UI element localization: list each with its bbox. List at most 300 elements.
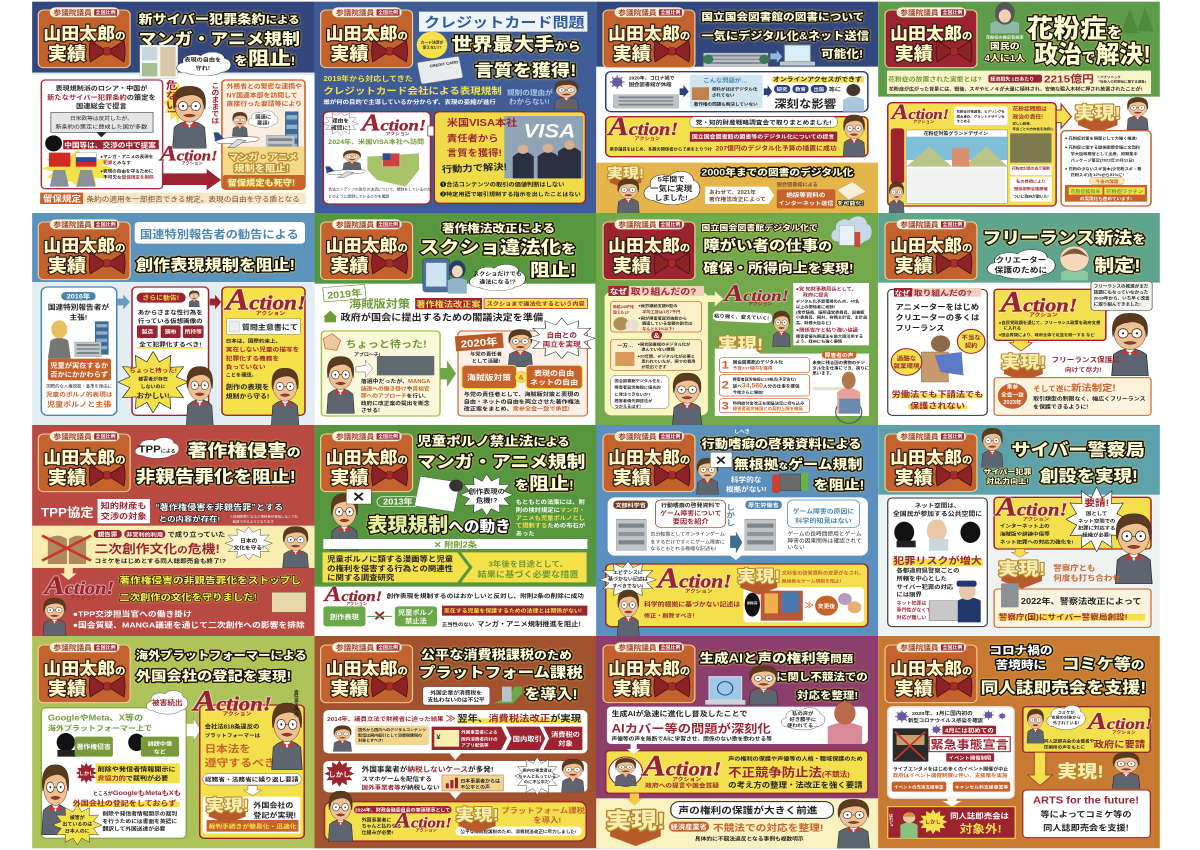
box: why: なぜ — [610, 287, 628, 296]
band: result text: 経済産業省 — [671, 822, 707, 831]
title: クレジットカード問題 — [424, 15, 585, 31]
panel: game regulation — [596, 425, 878, 637]
title: 行動嗜癖の啓発資料による — [701, 437, 862, 451]
box: result: 花粉症ワクチン — [1106, 188, 1143, 195]
box: results: 障害者の声 — [825, 351, 854, 359]
box: result with photo: 行動力で解決! — [441, 160, 507, 175]
icon: credit card: 使えない!? — [423, 45, 441, 50]
badge — [603, 7, 695, 68]
badge: 実績 — [613, 44, 652, 65]
badge: 参議院議員 — [900, 220, 939, 229]
badge — [38, 7, 130, 68]
box: action and result: 削除前 — [747, 600, 758, 605]
panel: screenshot ban — [315, 213, 597, 425]
action description: 正当性のない — [442, 621, 474, 628]
text: effort: 向けて尽力! — [1065, 365, 1102, 374]
arrow — [117, 295, 130, 309]
character with bubble — [617, 171, 700, 213]
box: new law: 全会一致 — [1001, 391, 1025, 398]
title: 無根拠なゲーム規制 — [734, 457, 862, 472]
box: new law: を保護できるように! — [1033, 403, 1088, 411]
title — [1027, 14, 1151, 68]
title: に関し不競法での — [776, 671, 868, 683]
box: why: 就業環境 — [894, 362, 919, 370]
subhead: 2019年から対応してきた — [323, 74, 413, 83]
action logo: Action! — [655, 563, 732, 594]
icon: phone and user — [423, 259, 467, 294]
box: action and result: ≫ — [805, 601, 814, 610]
result logo: 実現! — [998, 559, 1046, 579]
character with sign: 科学的な — [731, 475, 761, 484]
panel: child porn law — [315, 425, 597, 637]
box: results: 1 — [722, 358, 729, 371]
badge — [321, 642, 412, 703]
action logo: Action! — [392, 809, 452, 833]
title: 確保・所得向上を実現! — [703, 261, 854, 275]
box: treaty proposal: 犯罪とみなす — [103, 159, 132, 166]
box: why: 調達している金額の割合は — [642, 321, 692, 326]
title: コミケ等の — [1062, 655, 1144, 673]
box: visit: 合法コンテンツの取引の決済について、規制をしているのか、 — [328, 187, 435, 192]
box: action: 公平な消費税課税のため、消費税法改正に尽力しました! — [460, 828, 577, 835]
character — [271, 368, 299, 425]
box: ministries: をするだけですぐにゲーム障害に — [651, 539, 725, 545]
box: action: 日本法を — [205, 743, 251, 755]
badge: 山田太郎の — [326, 448, 408, 467]
box: why: 過酷な — [897, 355, 916, 362]
box: action details: よう、政府にも強く要請 — [796, 339, 842, 344]
badge: 山田太郎の — [43, 659, 126, 678]
character — [837, 799, 870, 848]
strip: cost: 「社会人の花粉症に関する調査」 — [1097, 79, 1148, 84]
strip: cost: 2215億円 — [1044, 72, 1094, 85]
box: damage — [41, 708, 186, 838]
badge: 参議院議員 — [336, 432, 374, 441]
badge: 参議院議員 — [54, 643, 92, 652]
box: problem flow: 出版 — [814, 86, 824, 93]
box: why: クリエーターの多くは — [895, 313, 980, 322]
box: crime risk: ネット犯罪は — [897, 600, 927, 606]
band: result text: 声の権利の保護が大きく前進 — [678, 804, 818, 816]
glossary strip — [40, 193, 306, 204]
badge: 全国比例 — [378, 9, 398, 16]
text: meetings — [1053, 563, 1121, 583]
band: result: を可能化! — [837, 199, 864, 207]
title: 阻止! — [530, 260, 576, 280]
burst: request: 犯罪に対応する — [1078, 525, 1115, 531]
badge: 全国比例 — [96, 9, 116, 16]
action description: マンガ・アニメ規制推進を阻止! — [477, 619, 581, 628]
box: results: 障害者就労施設に13拠点(予定含む) — [733, 377, 797, 381]
badge: 山田太郎の — [608, 236, 691, 255]
band: derivative culture: 非営利的利用 — [126, 531, 163, 538]
character with bubble: 2019年から、いち早く改善 — [1094, 295, 1150, 302]
box: results: 2 — [722, 378, 729, 391]
box: ministries: 障害の因果関係は確認されて — [787, 537, 862, 544]
box: next-year amendment: 2014年、議員立法で財務省に迫った結果 — [327, 715, 443, 723]
action logo: Action! — [994, 493, 1068, 522]
burst: request: 国として — [1086, 510, 1107, 517]
box: result: ● 花粉症対策を国策として力強く推進! — [1065, 136, 1137, 140]
box: wait: 邸へのアプローチを行い、 — [361, 392, 430, 400]
box: action details: 長、財務大臣など) — [796, 320, 832, 325]
box: why: なんと0.1%以下! — [642, 326, 674, 331]
badge: 参議院議員 — [54, 220, 92, 229]
box: why: ●20年間、デジタル化が必要と — [637, 354, 695, 358]
badge: 全国比例 — [378, 644, 398, 651]
action logo: アクション — [685, 587, 712, 595]
box: 2020: 両立を実現 — [543, 340, 582, 348]
arrow — [1056, 104, 1071, 128]
box: why: フリーランス — [895, 324, 945, 333]
title: サイバー犯罪 — [984, 467, 1032, 476]
arrow — [1028, 752, 1052, 786]
box: ministries: ゲームの長時間使用とゲーム — [787, 530, 862, 538]
heading 2013: 2013年 — [383, 496, 413, 507]
action logo: アクション — [70, 594, 96, 601]
result logo: 実現! — [1001, 352, 1046, 372]
icon: game console — [772, 472, 809, 493]
text: effort: フリーランス保護に — [1052, 355, 1120, 364]
badge — [603, 219, 695, 280]
box: result with photo: ❷特定用語で取引規制する指示を出したことはない — [440, 190, 581, 198]
box: damage: しかし — [79, 770, 94, 777]
action description: ✕ — [373, 610, 386, 624]
box: action — [994, 289, 1106, 351]
character — [1112, 752, 1140, 788]
box: problem flow: こんな問題が… — [703, 77, 748, 85]
box: 2020: 与党の責任者 — [470, 351, 502, 357]
character with bubble: に取り組んできました! — [1094, 301, 1141, 308]
box: 2020: 自由・ネットの自由を両立させた著作権法 — [464, 398, 580, 405]
badge: 参議院議員 — [900, 432, 939, 441]
box: further recommendation: 製造 — [142, 328, 154, 336]
badge: 参議院議員 — [54, 432, 92, 441]
box: result — [994, 583, 1151, 627]
badge: 実績 — [330, 679, 369, 700]
action description: 禁止法 — [405, 616, 427, 625]
arrow — [942, 798, 962, 807]
result logo: 実現! — [205, 796, 249, 815]
box: action: 負っていない — [226, 362, 266, 371]
box: action details: 障害者優先調達法を最大限活用する — [796, 334, 863, 338]
box: wait: 政府に改正案の提出を断念 — [361, 399, 430, 407]
box: new law — [994, 378, 1151, 415]
box: crime risk: には限界 — [897, 591, 922, 599]
panel: national diet library digitisation — [596, 2, 878, 213]
icon: credit card: CREDIT CARD — [429, 59, 459, 68]
box: ministries: 科学的知見はない — [795, 516, 852, 525]
box: wait: 落選中だったが、MANGA — [361, 377, 430, 385]
explanatory text: 則の検討規定にマンガ・ — [516, 506, 585, 514]
box: action details: ●関係省庁と粘り強い協議 — [796, 327, 858, 333]
result logo: 実現! — [607, 165, 644, 182]
box: action: を導入! — [533, 815, 561, 825]
box: action: 党・知的財産戦略調査会で取りまとめました! — [696, 118, 832, 126]
action logo: Action! — [722, 278, 789, 306]
box: results: 国会図書館のデジタル化 — [733, 359, 784, 366]
box: damage: ところがGoogleもMetaもXも — [93, 789, 181, 797]
action text: 二次創作の文化を守りました! — [119, 591, 257, 603]
box: excluded: 同人誌即売会は — [950, 811, 1009, 821]
character — [272, 689, 302, 770]
subhead: クレジットカード会社による表現規制 — [323, 85, 502, 97]
box: action — [200, 705, 304, 838]
box: action details: (衆参議員、議院運営委員長、図書館 — [796, 310, 865, 314]
burst — [599, 561, 657, 598]
action logo: アクション — [386, 130, 410, 137]
title: を阻止! — [234, 47, 295, 70]
box: results: 予算207億円を獲得 — [733, 365, 773, 372]
badge — [603, 431, 695, 492]
box: problem flow: 資料がほぼデジタル化 — [712, 86, 758, 93]
box: why: 思われていたが、国での費用 — [641, 359, 696, 364]
badge: 全国比例 — [942, 433, 963, 440]
box: action — [324, 802, 586, 841]
band: derivative culture: 文化を守る! — [233, 544, 264, 552]
box: problem flow: 等に — [829, 85, 841, 93]
box: next-year amendment: 国内取引 — [513, 734, 542, 743]
box: action: 質問主意書にて — [242, 322, 298, 331]
box: why: 時給243円を — [613, 304, 635, 309]
badge: 山田太郎の — [890, 448, 973, 467]
badge: 全国比例 — [378, 433, 398, 440]
box: action: 関係閣僚会議開催 — [1014, 186, 1048, 191]
title: 国立国会図書館の図書について — [701, 10, 864, 23]
result logo — [606, 809, 665, 846]
box: problem flow: 国会図書館が休館 — [629, 81, 671, 88]
action logo: Action! — [322, 583, 382, 607]
box: result — [1061, 131, 1151, 206]
figure: 1 in 4 — [984, 2, 1026, 63]
result logo: 実現! — [455, 806, 499, 824]
badge: 山田太郎の — [608, 24, 691, 43]
heading 2019: 政府が国会に提出するための閣議決定を準備 — [341, 312, 544, 323]
box: 2016 claim: 主張! — [70, 313, 87, 321]
panel: credit card problem — [315, 2, 597, 213]
box: action: まとめる — [957, 118, 970, 123]
title — [701, 428, 865, 493]
box: action: 登記が実現! — [253, 810, 296, 819]
box: action: 創作の表現を — [226, 382, 269, 391]
title: を導入! — [524, 686, 578, 703]
title: プラットフォーム課税 — [419, 663, 583, 681]
title — [419, 12, 587, 80]
heading 2019: 2019年 — [327, 287, 362, 301]
character — [1127, 97, 1148, 130]
box: action: ことを確認。 — [226, 372, 257, 378]
badge: 実績 — [330, 256, 369, 277]
box: however: 日本事業者からは — [460, 778, 500, 784]
box: results: 延べ34,560人分の仕事を確保 — [733, 383, 800, 389]
title — [981, 644, 1146, 697]
box: further recommendation — [118, 287, 209, 415]
box: ministries: 文部科学省 — [615, 501, 646, 509]
box: however: ちゃんと払っている — [518, 774, 556, 778]
box: wait: ちょっと待った! — [346, 338, 427, 350]
box: next-year amendment: 対象とすべき! — [358, 738, 383, 743]
box: ARTS for the future — [1023, 790, 1150, 838]
box: action: 外国会社の — [253, 800, 293, 809]
icon: manga and burst: 危機!? — [476, 496, 497, 504]
figure: 1 in 4: 花粉症の推定有病率 — [986, 35, 1024, 39]
box: damage: 著作権侵害 — [77, 742, 112, 751]
box: excluded — [888, 807, 1015, 838]
character with bubble: 一気に実現 — [650, 184, 692, 193]
action logo: Action! — [641, 749, 721, 782]
heading 2013 — [367, 496, 511, 536]
title: 創設を実現! — [1040, 466, 1138, 485]
panel: new cybercrime treaty — [32, 2, 315, 213]
box: treaty proposal: ●マンガ・アニメの表現を — [100, 153, 153, 160]
badge: 全国比例 — [96, 433, 116, 440]
box: ministries: ゲーム障害の原因に — [793, 507, 854, 515]
badge: 参議院議員 — [54, 8, 92, 17]
heading 2013: 表現規制への動き — [367, 515, 511, 536]
box: action and result: 科学的根拠に基づかない記述は — [644, 600, 741, 608]
icon: credit card — [417, 32, 463, 84]
box: action: 外されている! — [1053, 720, 1079, 725]
box: crime risk: 専門性がなくて — [897, 607, 932, 614]
strip: cost: 花粉症が広がった背景には、戦後、スギやヒノキが大量に植林され、安価な輸入木材に押され放置されたことが! — [889, 86, 1143, 93]
speech bubble: 表現の自由を — [184, 56, 221, 64]
box: action: 総務省・法務省に繰り返し要請 — [205, 775, 299, 783]
title: 花粉症を — [1027, 14, 1122, 43]
TPP clause: との内容が存在! — [159, 514, 220, 524]
band: result: 2000年までの図書のデジタル化 — [701, 166, 853, 178]
box: why: ●就労継続支援B型の — [638, 303, 677, 308]
box: however: しかし — [329, 771, 350, 779]
arrow — [450, 792, 461, 799]
action logo: アクション — [346, 600, 367, 606]
title: 創作表現規制を阻止! — [136, 256, 295, 274]
box: action: ●自民党政調を通じて、フリーランス政策を政府文書 — [999, 319, 1100, 325]
box: action: 日本は、国際約束上、 — [226, 337, 281, 344]
badge: 実績 — [48, 679, 87, 700]
action logo: アクション — [416, 827, 437, 832]
box: 2016 claim: 国際的な人権規範・基準を理由に — [46, 383, 112, 389]
box: result: 今後の課題 — [1096, 178, 1119, 185]
badge: 実績 — [895, 44, 934, 65]
box: AI cover problem: 私の声が — [792, 710, 814, 717]
box: action and result — [606, 564, 868, 627]
band: derivative culture: コミケをはじめとする同人誌即売会も終了!? — [95, 557, 226, 565]
burst: 被害が — [70, 814, 85, 821]
badge — [885, 219, 977, 280]
TPP clause: ※非親告罪になると権利者が告訴しなくても — [230, 514, 298, 518]
box: however: 不公平との声 — [460, 784, 490, 790]
band: result: あわせて、2021年 — [709, 188, 757, 196]
box: action and result: 文科省の啓発資料の変更がなされ、 — [782, 570, 864, 576]
box: why: 一方… — [617, 342, 633, 349]
box: damage: 非協力的で裁判が必要 — [98, 774, 169, 782]
box: next-year amendment: 外国事業者による — [461, 729, 498, 736]
box: 2016 claim: 児童ポルノと主張 — [47, 399, 112, 409]
box: wait: 議連への働き掛けや首相官 — [361, 385, 430, 392]
box: ARTS for the future: 等によってコミケ等の — [1040, 809, 1132, 819]
title: 国立国会図書館デジタル化で — [701, 223, 818, 232]
box: further recommendation: 被害者が存在 — [138, 376, 168, 383]
bubble and map: 支払わないのは不公平 — [427, 696, 485, 704]
icon: cedar trees — [1120, 7, 1154, 33]
box: new law: 衆参 — [1007, 383, 1019, 391]
burst: request: ネット空間での — [1078, 518, 1115, 524]
box: why: 障害者優先調達法が — [615, 398, 652, 403]
box: further recommendation: あからさまな性行為を — [138, 309, 203, 316]
box: 2020: 表現の自由 — [534, 368, 574, 377]
box: action — [222, 287, 305, 415]
box: wait — [321, 331, 440, 416]
box: crime risk — [888, 498, 987, 627]
box: action: 裁判手続きが簡易化・迅速化 — [209, 822, 297, 830]
box: action: プラットフォーマーは — [205, 732, 261, 739]
box: however: 国内の事業者は — [523, 768, 552, 773]
badge: 実績 — [330, 44, 369, 65]
character — [617, 590, 639, 637]
badge: 実績 — [895, 468, 934, 489]
yellow chevron panel: 児童ポルノに類する漫画等と児童 — [327, 554, 453, 564]
box: UN visit result: 要請! — [257, 120, 270, 126]
box: damage: 誹謗中傷 — [148, 740, 172, 748]
title: マンガ・アニメ規制 — [417, 452, 585, 471]
box: action details: ●党 知財事務局長として、 — [796, 286, 857, 292]
box: why: 契約 — [965, 342, 978, 349]
TPP clause: 交渉の対象 — [101, 511, 147, 521]
title: 外国会社の登記を実現! — [136, 668, 291, 684]
box: next-year amendment: ≫ — [446, 714, 456, 724]
action logo: アクション — [256, 310, 286, 317]
badge: 山田太郎の — [326, 236, 408, 255]
band: derivative culture — [32, 526, 315, 568]
box: ministries: ゲーム障害について — [660, 509, 721, 517]
box: result with photo: 米国VISA本社 — [447, 117, 518, 129]
box: however: スマホゲームを配信する — [362, 775, 432, 783]
box: treaty proposal: 国連総会で提言 — [76, 101, 127, 110]
box: crime risk: 対応が難しい — [897, 614, 927, 621]
action logo: Action! — [1086, 707, 1152, 735]
speech bubble and creator: 保護のために — [995, 265, 1047, 275]
box: further recommendation: 全て犯罪化するべき! — [139, 340, 201, 348]
box: action details: 政府に提言 — [803, 292, 829, 298]
box: 2020: 自由との — [547, 331, 577, 339]
box: action: 私の質問により — [1016, 179, 1046, 184]
action description: 創作表現 — [330, 612, 359, 621]
box: crime risk: 所轄を中心とした — [897, 575, 947, 583]
box: emergency — [888, 707, 1014, 798]
figure: 1 in 4: 4人に1人 — [984, 54, 1026, 63]
TPP clause: “著作権侵害を非親告罪”とする — [155, 502, 283, 512]
box: UN visit result: 国連に — [255, 114, 271, 120]
badge — [38, 642, 130, 703]
badge: 参議院議員 — [900, 643, 939, 652]
box: problem flow — [606, 72, 868, 112]
action logo: Action! — [191, 683, 272, 717]
box: action: 花粉症問題は — [1012, 105, 1048, 113]
tenacity callout: 粘り強く、変えていく! — [714, 313, 770, 322]
box: 2020: & — [518, 374, 524, 382]
badge: 山田太郎の — [890, 236, 973, 255]
result logo — [718, 334, 763, 363]
band: derivative culture: で成り立っていた — [168, 530, 225, 539]
title: を阻止! — [814, 477, 865, 493]
box: visit: 2024年、米国VISA本社へ訪問 — [328, 137, 425, 146]
box: action — [888, 103, 1056, 206]
band: result text: 不競法での対応を整理! — [713, 822, 823, 834]
strip: cost: 経済損失 1日あたり — [990, 76, 1034, 82]
bubble and map — [423, 687, 522, 705]
action logo: アクション — [1023, 516, 1049, 523]
box: action details — [793, 283, 869, 345]
